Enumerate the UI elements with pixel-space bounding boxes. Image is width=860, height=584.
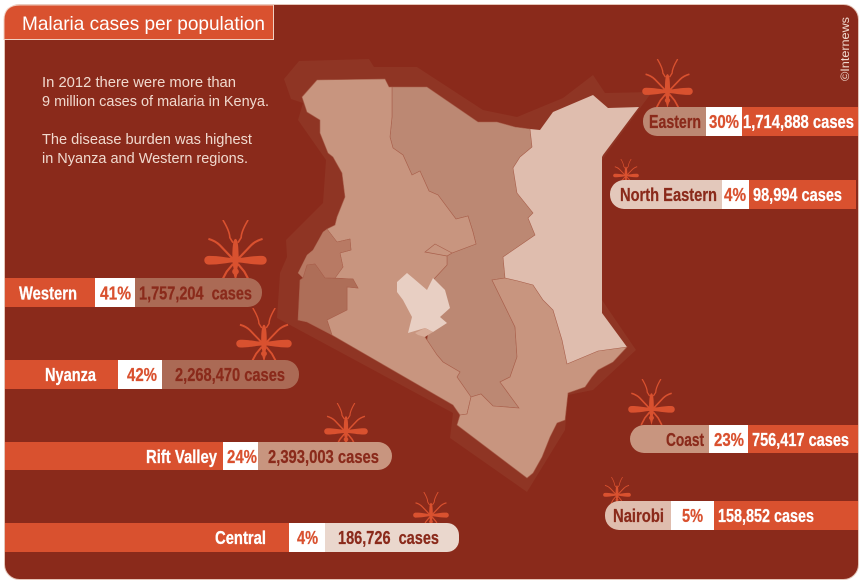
bar: Western: Western xyxy=(19,284,77,304)
bar: Central: 186,726 cases xyxy=(338,528,439,548)
bar: North Eastern: 98,994 cases xyxy=(753,185,842,205)
bar: Western: 1,757,204 cases xyxy=(139,284,252,304)
icon: mosquito Nairobi xyxy=(603,477,631,504)
bar: Coast xyxy=(630,425,858,453)
bar: Central xyxy=(5,523,459,552)
intro text: In 2012 there were more than xyxy=(42,75,236,91)
bar: Eastern xyxy=(643,107,858,136)
bar: Nairobi: Nairobi xyxy=(613,506,664,526)
intro text: 9 million cases of malaria in Kenya. xyxy=(42,94,269,110)
bar: Nairobi: 158,852 cases xyxy=(718,506,814,526)
bar: Eastern: 30% xyxy=(709,112,739,132)
icon: mosquito Nyanza xyxy=(236,308,292,362)
region: Eastern xyxy=(390,87,535,408)
icon: mosquito Central xyxy=(413,492,449,527)
copyright credit: ©Internews xyxy=(840,17,852,81)
bar: Rift Valley: Rift Valley xyxy=(146,447,217,467)
region: Western xyxy=(298,229,351,278)
intro text xyxy=(42,75,269,167)
bar: Coast: Coast xyxy=(666,430,704,450)
bar: Nairobi xyxy=(605,501,858,530)
region: Central xyxy=(397,273,450,333)
region: Coast xyxy=(457,278,627,478)
icon: mosquito Eastern xyxy=(642,59,693,108)
region: Nairobi xyxy=(415,328,433,337)
intro text: The disease burden was highest xyxy=(42,132,252,148)
icon: mosquito Coast xyxy=(628,379,675,425)
bar: North Eastern: North Eastern xyxy=(620,185,717,205)
icon: mosquito North Eastern xyxy=(613,159,639,184)
bar: Central: 4% xyxy=(297,528,318,548)
bar: Rift Valley: 24% xyxy=(227,447,257,467)
bar: Western xyxy=(5,278,262,307)
title banner xyxy=(4,5,274,40)
bar: Nyanza: 42% xyxy=(127,365,157,385)
map halo xyxy=(277,59,652,492)
bar: North Eastern: 4% xyxy=(724,185,746,205)
bar: Nyanza: Nyanza xyxy=(45,365,97,385)
map of Kenya xyxy=(277,59,652,492)
bar: Nyanza xyxy=(5,360,299,389)
bar: Nairobi: 5% xyxy=(682,506,703,526)
bar: Coast: 23% xyxy=(714,430,744,450)
bar: Rift Valley: 2,393,003 cases xyxy=(268,447,379,467)
bar: North Eastern xyxy=(610,180,856,209)
region: Nyanza xyxy=(298,264,358,335)
intro text: in Nyanza and Western regions. xyxy=(42,151,248,167)
bar: Western: 41% xyxy=(100,284,131,304)
icon: mosquito Rift Valley xyxy=(324,403,368,446)
title: Malaria cases per population xyxy=(22,13,265,35)
region: North Eastern xyxy=(503,95,639,364)
bar: Rift Valley xyxy=(5,442,392,470)
bar: Nyanza: 2,268,470 cases xyxy=(175,365,285,385)
bar: Eastern: Eastern xyxy=(649,112,701,132)
icon: mosquito Western xyxy=(204,220,267,281)
region: Rift Valley xyxy=(302,79,476,415)
bar: Central: Central xyxy=(215,528,266,548)
